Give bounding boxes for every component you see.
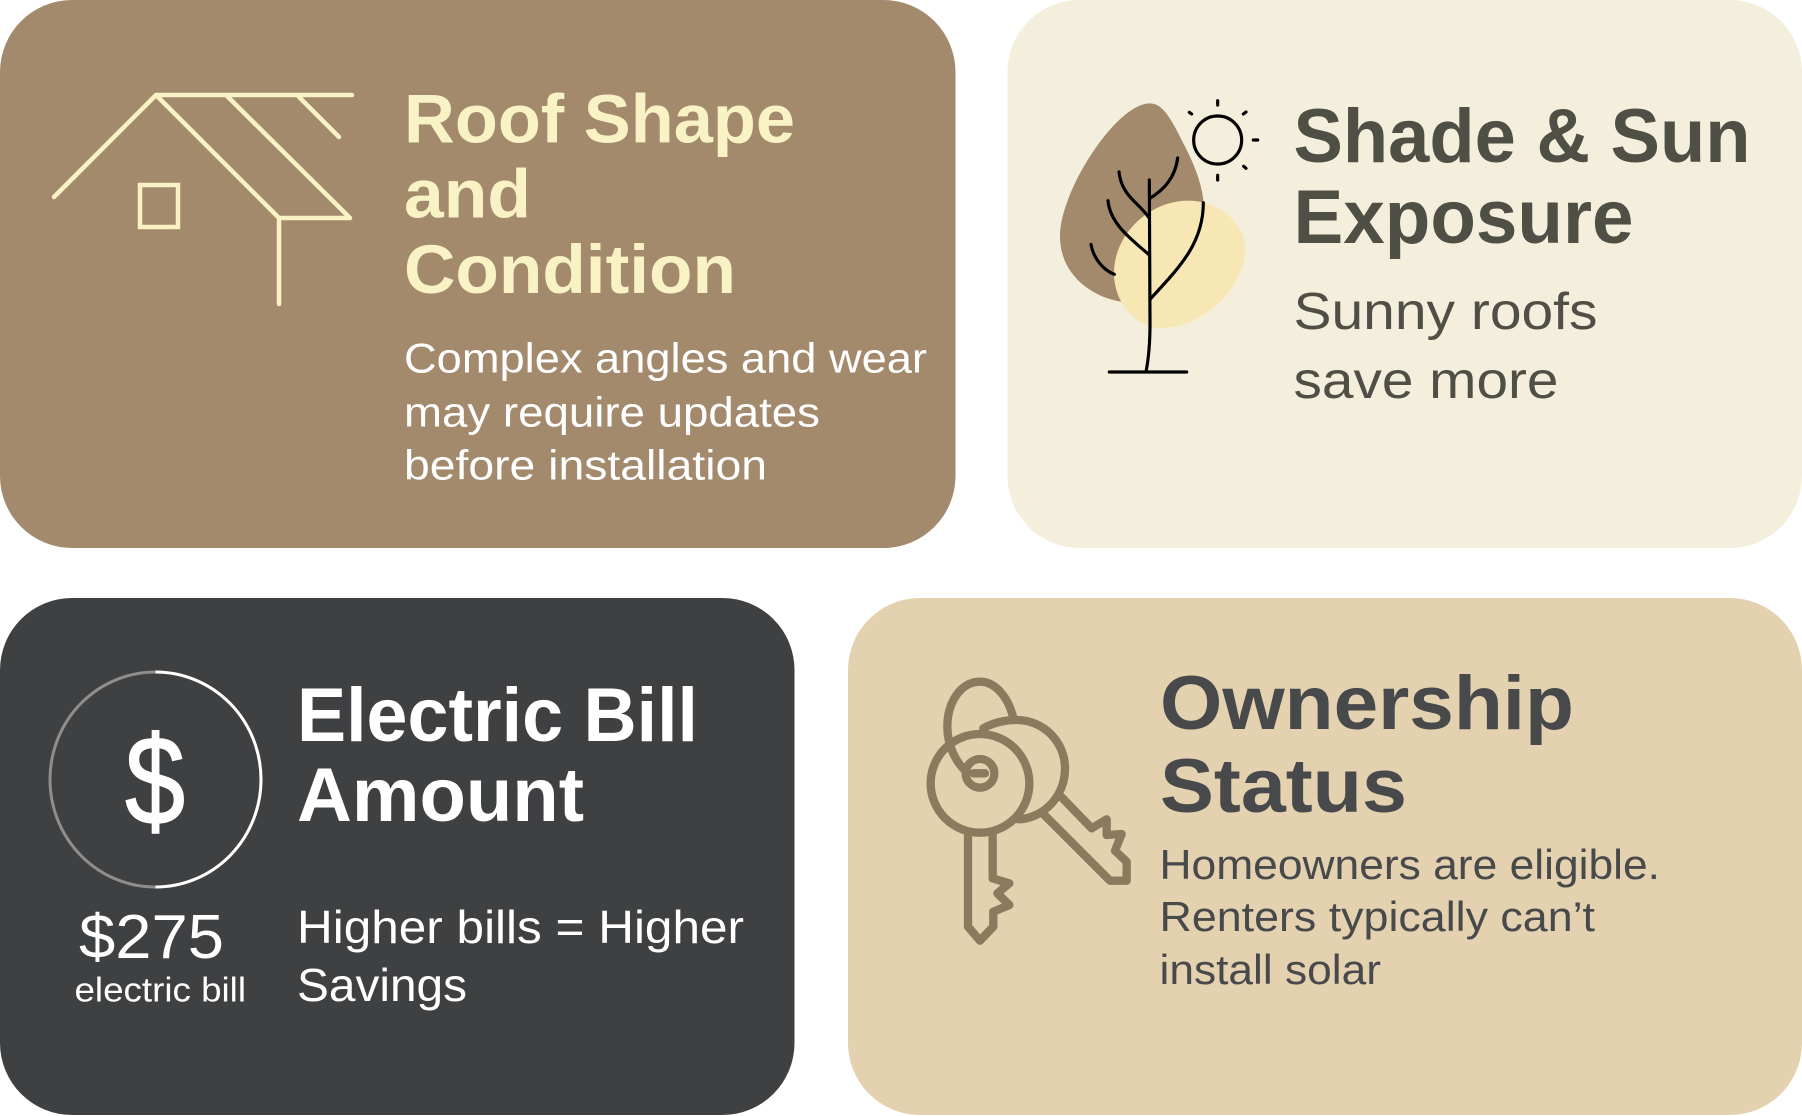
heading: roof shape and condition: Condition (404, 231, 736, 308)
heading: ownership status: Status (1160, 744, 1407, 829)
stat: $275 electric bill: $275 (79, 903, 224, 972)
panel background: roof (0, 0, 956, 548)
icon: keys (931, 682, 1127, 941)
text: roof description: before installation (404, 442, 767, 488)
stat: $275 electric bill: electric bill (74, 972, 246, 1010)
heading: roof shape and condition: Roof Shape (404, 80, 795, 158)
icon: house roof (54, 95, 352, 304)
icon: tree and sun (1060, 101, 1258, 372)
panel background: electric bill (0, 598, 794, 1115)
text: electric bill description: Savings (297, 959, 467, 1011)
text: shade description: save more (1294, 352, 1558, 410)
heading: ownership status: Ownership (1160, 661, 1574, 746)
heading: electric bill amount: Electric Bill (297, 673, 698, 758)
text: shade description: Sunny roofs (1294, 283, 1598, 341)
text: ownership description: Renters typically can’t (1160, 893, 1595, 940)
icon: dollar in circle (50, 672, 261, 887)
heading: shade and sun exposure: Shade & Sun (1294, 94, 1750, 179)
text: roof description: Complex angles and wear (404, 334, 927, 382)
heading: shade and sun exposure: Exposure (1294, 175, 1634, 260)
panel: roof shape and condition (0, 0, 956, 548)
panel: shade and sun exposure (1008, 0, 1802, 548)
text: ownership description: Homeowners are eligible. (1160, 841, 1660, 888)
heading: electric bill amount: Amount (297, 753, 584, 838)
panel: electric bill amount (0, 598, 794, 1115)
text: electric bill description: Higher bills = Higher (297, 901, 744, 953)
panel background: ownership (848, 598, 1802, 1115)
text: ownership description: install solar (1160, 946, 1381, 993)
text: roof description: may require updates (404, 388, 820, 436)
panel background: shade (1008, 0, 1802, 548)
stat: $275 electric bill (74, 903, 246, 1010)
icon: dollar in circle: $ (125, 710, 185, 851)
panel: ownership status (848, 598, 1802, 1115)
heading: roof shape and condition: and (404, 156, 531, 232)
